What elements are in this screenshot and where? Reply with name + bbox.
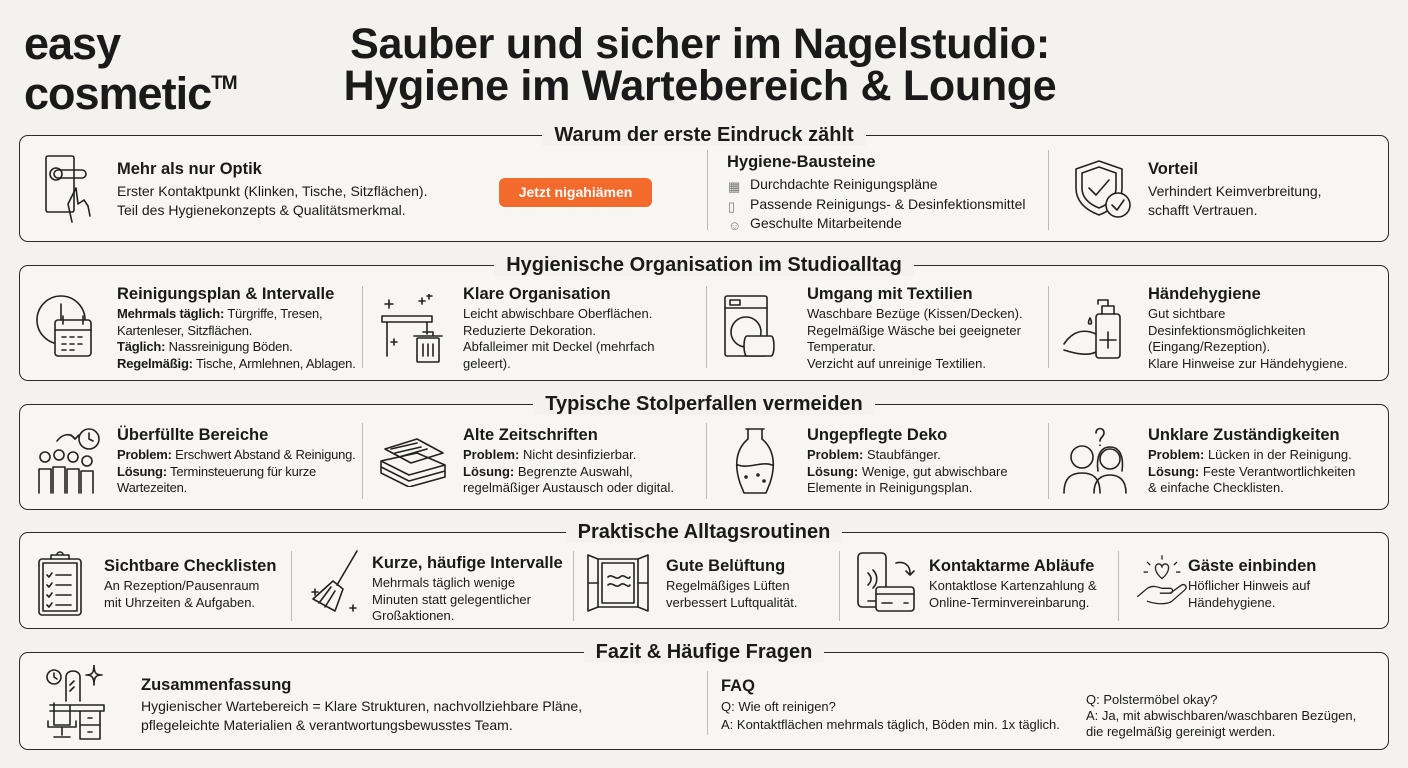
text: Textilien: Regelmäßige Wäsche bei geeigneter — [807, 322, 1021, 338]
text: Textilien: Umgang mit Textilien — [807, 285, 973, 303]
panel: Routinen — [19, 532, 1389, 629]
icon: magazines — [380, 438, 446, 487]
text: Vorteil — [1148, 160, 1322, 218]
panel: Stolperfallen — [19, 404, 1389, 510]
text: FAQ 1: Q: Wie oft reinigen? — [721, 699, 836, 714]
text: FAQ 1 — [721, 676, 1060, 734]
icon: two people question — [1063, 428, 1127, 494]
text: Alte Zeitschriften: Lösung: Begrenzte Auswahl, — [463, 464, 633, 478]
text: Vorteil: Verhindert Keimverbreitung, — [1148, 183, 1322, 199]
button: Jetzt nigahiämen — [519, 184, 632, 200]
icon: vase — [736, 428, 774, 494]
heading: Hygienische Organisation im Studioalltag — [506, 254, 902, 276]
icon: shield — [1075, 160, 1131, 218]
text: Überfüllte Bereiche: Lösung: Terminsteuerung für kurze — [117, 464, 316, 478]
text: Kurze Intervalle — [372, 554, 563, 623]
text: Textilien: Waschbare Bezüge (Kissen/Decken). — [807, 306, 1023, 321]
text: Gute Belüftung: Gute Belüftung — [666, 557, 785, 575]
text: Reinigungsplan — [117, 285, 356, 370]
text: Zusammenfassung: Zusammenfassung — [141, 676, 291, 694]
icon: window — [587, 554, 649, 612]
text: Ungepflegte Deko: Problem: Staubfänger. — [807, 447, 941, 462]
text: Klare Organisation: Leicht abwischbare Oberflächen. — [463, 306, 652, 321]
text: FAQ 2 — [1086, 692, 1356, 740]
text: Textilien — [807, 285, 1023, 370]
text: Unklare Zuständigkeiten — [1148, 426, 1355, 495]
button — [499, 178, 652, 207]
text: Hygiene-Bausteine — [727, 153, 1025, 231]
text: Gäste einbinden: Gäste einbinden — [1188, 557, 1316, 575]
text: Unklare Zuständigkeiten: Unklare Zuständigkeiten — [1148, 426, 1340, 444]
text: Mehr als nur Optik: Teil des Hygienekonzepts & Qualitätsmerkmal. — [117, 202, 406, 218]
text: Hygiene-Bausteine: Geschulte Mitarbeitende — [750, 215, 902, 231]
icon: door handle — [45, 155, 91, 223]
panel: Fazit — [19, 652, 1389, 750]
text: Gäste einbinden: Höflicher Hinweis auf — [1188, 578, 1310, 593]
text: Ungepflegte Deko: Lösung: Wenige, gut abwischbare — [807, 464, 1008, 478]
text: Klare Organisation: Reduzierte Dekoration. — [463, 322, 596, 338]
panel: Organisation — [19, 265, 1389, 381]
text: Zusammenfassung: pflegeleichte Materialien & verantwortungsbewusstes Team. — [141, 717, 513, 733]
icon: heart hand — [1136, 555, 1187, 604]
text: Reinigungsplan: Kartenleser, Sitzflächen. — [117, 322, 252, 338]
icon: vanity desk — [46, 665, 105, 740]
text: Kurze Intervalle: Mehrmals täglich wenige — [372, 575, 515, 590]
text: Alte Zeitschriften — [463, 426, 674, 495]
text: Reinigungsplan: Täglich: Nassreinigung Böden. — [117, 339, 293, 354]
text: Sichtbare Checklisten: Sichtbare Checklisten — [104, 557, 276, 575]
text: Zusammenfassung: Hygienischer Wartebereich = Klare Strukturen, nachvollziehbare Pläne, — [141, 698, 582, 714]
text: Sichtbare Checklisten — [104, 557, 276, 610]
text: Reinigungsplan: Mehrmals täglich: Türgriffe, Tresen, — [117, 306, 322, 321]
text: Alte Zeitschriften: Problem: Nicht desinfizierbar. — [463, 447, 636, 462]
text: Überfüllte Bereiche: Überfüllte Bereiche — [117, 426, 268, 444]
text: Vorteil: Vorteil — [1148, 160, 1198, 178]
text: Alte Zeitschriften: Alte Zeitschriften — [463, 426, 598, 444]
text: Überfüllte Bereiche: Wartezeiten. — [117, 480, 187, 495]
text: Gute Belüftung: verbessert Luftqualität. — [666, 594, 798, 610]
heading: Praktische Alltagsroutinen — [578, 521, 830, 543]
panel: erster Eindruck — [19, 135, 1389, 242]
text: FAQ 2: die regelmäßig gereinigt werden. — [1086, 724, 1275, 739]
text: Gute Belüftung — [666, 557, 798, 610]
text: Überfüllte Bereiche: Problem: Erschwert Abstand & Reinigung. — [117, 447, 356, 462]
text: Händehygiene: Klare Hinweise zur Händehygiene. — [1148, 356, 1347, 370]
text: FAQ 2: A: Ja, mit abwischbaren/waschbaren Bezügen, — [1086, 708, 1356, 723]
icon: checklist — [38, 551, 82, 616]
text: Gute Belüftung: Regelmäßiges Lüften — [666, 578, 790, 593]
icon: table bin — [381, 294, 443, 363]
logo: easy — [24, 18, 120, 69]
text: Händehygiene: Händehygiene — [1148, 285, 1261, 303]
logo — [24, 18, 237, 119]
title: Sauber und sicher im Nagelstudio: — [350, 20, 1050, 68]
icon: sanitizer hand — [1063, 299, 1121, 359]
icon: broom — [311, 550, 358, 612]
text: Mehr als nur Optik — [117, 160, 427, 218]
text: Ungepflegte Deko: Ungepflegte Deko — [807, 426, 947, 444]
text: Kurze Intervalle: Kurze, häufige Intervalle — [372, 554, 563, 572]
text: Kurze Intervalle: Minuten statt gelegentlicher — [372, 592, 531, 606]
text: Hygiene-Bausteine: Durchdachte Reinigungspläne — [750, 176, 938, 192]
heading: Typische Stolperfallen vermeiden — [545, 393, 863, 415]
icons: small bullets: ▯ — [728, 198, 735, 214]
icon: washing machine — [724, 295, 775, 357]
text: Händehygiene: Gut sichtbare — [1148, 306, 1225, 321]
text: Unklare Zuständigkeiten: Lösung: Feste Verantwortlichkeiten — [1148, 464, 1355, 478]
icon: crowd — [38, 428, 100, 494]
text: Hygiene-Bausteine: Hygiene-Bausteine — [727, 153, 876, 171]
text: Händehygiene — [1148, 285, 1347, 370]
text: Gäste einbinden — [1188, 557, 1316, 610]
text: Kontaktarme Abläufe — [929, 557, 1097, 610]
text: Reinigungsplan: Regelmäßig: Tische, Armlehnen, Ablagen. — [117, 356, 356, 370]
icon: clock calendar — [36, 295, 92, 357]
text: Sichtbare Checklisten: mit Uhrzeiten & Aufgaben. — [104, 594, 255, 610]
text: FAQ 1: FAQ — [721, 677, 755, 695]
icons: small bullets: ▦ — [728, 179, 740, 194]
text: Klare Organisation — [463, 285, 654, 370]
text: Gäste einbinden: Händehygiene. — [1188, 594, 1275, 610]
text: Sichtbare Checklisten: An Rezeption/Pausenraum — [104, 578, 259, 593]
icons: small bullets — [728, 179, 741, 233]
text: Kontaktarme Abläufe: Online-Terminvereinbarung. — [929, 594, 1089, 610]
text: Textilien: Verzicht auf unreinige Textilien. — [807, 356, 986, 370]
text: Kontaktarme Abläufe: Kontaktlose Kartenzahlung & — [929, 578, 1097, 593]
text: Klare Organisation: geleert). — [463, 356, 511, 370]
text: Unklare Zuständigkeiten: Problem: Lücken in der Reinigung. — [1148, 447, 1352, 462]
text: Ungepflegte Deko — [807, 426, 1008, 495]
text: Vorteil: schafft Vertrauen. — [1148, 202, 1257, 218]
heading: Fazit & Häufige Fragen — [596, 641, 812, 663]
text: Alte Zeitschriften: regelmäßiger Austausch oder digital. — [463, 480, 674, 495]
text: Unklare Zuständigkeiten: & einfache Checklisten. — [1148, 480, 1284, 495]
text: Ungepflegte Deko: Elemente in Reinigungsplan. — [807, 480, 972, 495]
logo: cosmeticTM — [24, 68, 237, 119]
text: Klare Organisation: Abfalleimer mit Deckel (mehrfach — [463, 339, 654, 354]
text: Textilien: Temperatur. — [807, 339, 876, 354]
text: Überfüllte Bereiche — [117, 426, 356, 495]
heading: Warum der erste Eindruck zählt — [554, 124, 854, 146]
text: Klare Organisation: Klare Organisation — [463, 285, 611, 303]
text: Kontaktarme Abläufe: Kontaktarme Abläufe — [929, 557, 1094, 575]
text: Händehygiene: Desinfektionsmöglichkeiten — [1148, 322, 1306, 338]
text: Mehr als nur Optik: Erster Kontaktpunkt (Klinken, Tische, Sitzflächen). — [117, 183, 427, 199]
text: FAQ 1: A: Kontaktflächen mehrmals täglich, Böden min. 1x täglich. — [721, 717, 1060, 732]
title: Hygiene im Wartebereich & Lounge — [344, 62, 1056, 110]
text: Reinigungsplan: Reinigungsplan & Intervalle — [117, 285, 334, 303]
icon: phone card — [857, 552, 915, 612]
text: Hygiene-Bausteine: Passende Reinigungs- & Desinfektionsmittel — [750, 196, 1025, 212]
text: Mehr als nur Optik: Mehr als nur Optik — [117, 160, 262, 178]
icons: small bullets: ☺ — [728, 218, 741, 233]
text: Kurze Intervalle: Großaktionen. — [372, 608, 454, 623]
text: Zusammenfassung — [141, 675, 582, 735]
text: Händehygiene: (Eingang/Rezeption). — [1148, 339, 1270, 354]
title — [344, 20, 1056, 110]
text: FAQ 2: Q: Polstermöbel okay? — [1086, 692, 1218, 707]
